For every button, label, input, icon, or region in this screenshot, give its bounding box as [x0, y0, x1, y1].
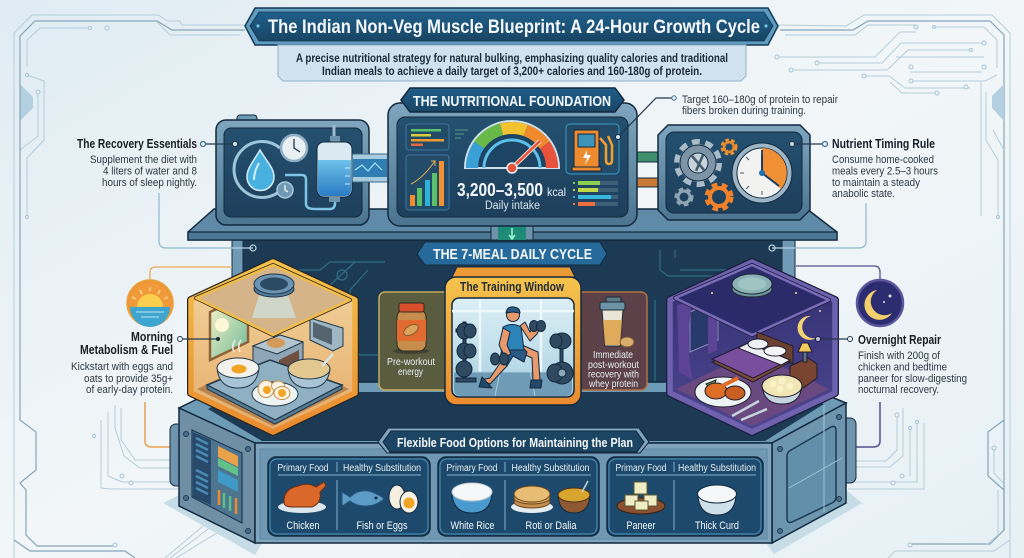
icon: paneer cubes [617, 482, 665, 514]
panel: recovery essentials machine [216, 115, 388, 225]
top lid [675, 265, 829, 335]
daily intake label: Daily intake [485, 200, 540, 212]
column headers: Healthy Substitution [343, 463, 421, 474]
oven [253, 335, 303, 377]
callout heading: Overnight Repair [858, 332, 941, 347]
circuit decoration: left [14, 15, 245, 558]
base console [170, 382, 856, 543]
icon: protein shaker [600, 297, 634, 347]
gym scene [452, 298, 574, 397]
nutrient timing callout [790, 136, 938, 200]
small bars card [406, 124, 468, 150]
cutlery [732, 401, 767, 420]
icon: fish [342, 491, 384, 506]
bed [712, 332, 793, 382]
gauge [465, 121, 559, 173]
panel: rice options [438, 457, 599, 536]
callout heading: Nutrient Timing Rule [832, 136, 935, 151]
plate: boiled eggs [252, 380, 298, 406]
recovery essentials callout [77, 136, 238, 189]
callout body: Kickstart with eggs and [71, 361, 173, 373]
subtitle panel [278, 45, 746, 81]
pipe link with glow [352, 154, 388, 182]
post-workout text: whey protein [588, 379, 638, 390]
icon: moon badge [857, 280, 903, 326]
title banner [245, 8, 778, 45]
callout body: nocturnal recovery. [858, 384, 939, 396]
icon: peanut butter jar [393, 303, 429, 354]
left control panel [192, 430, 242, 523]
icon: sunrise badge [127, 280, 173, 327]
heading text: THE NUTRITIONAL FOUNDATION [413, 93, 611, 110]
morning callout [71, 329, 220, 396]
connector lines [145, 193, 880, 447]
panel: post-workout [575, 292, 647, 390]
icon: eggs [389, 485, 418, 513]
tray [207, 360, 342, 424]
heading text: Flexible Food Options for Maintaining the Plan [397, 435, 633, 450]
heading: flexible food options [378, 428, 649, 453]
protein target callout [616, 94, 838, 140]
callout body: Consume home-cooked [832, 154, 934, 166]
plate: chicken [695, 377, 751, 407]
food labels: Thick Curd [695, 520, 739, 532]
overnight cube room [670, 262, 835, 432]
callout body: 4 liters of water and 8 [103, 166, 197, 178]
food labels: Chicken [286, 520, 320, 532]
icon: orange gear [708, 186, 730, 208]
callout text: fibers broken during training. [682, 105, 806, 117]
panel: pre-workout [379, 292, 451, 390]
rising bar chart [406, 155, 449, 210]
heading text: THE 7-MEAL DAILY CYCLE [433, 247, 592, 263]
circuit decoration: right [775, 15, 1010, 558]
calorie number: 3,200–3,500 [457, 180, 543, 200]
callout body: of early-day protein. [86, 384, 173, 396]
subtitle text: A precise nutritional strategy for natural bulking, emphasizing quality calories and traditional [296, 51, 728, 65]
food labels: Fish or Eggs [356, 520, 408, 532]
bowl: egg [217, 340, 259, 388]
icon: water tank [317, 125, 352, 202]
post-workout text: Immediate [593, 350, 633, 361]
icon: clock [281, 135, 307, 161]
top lid [196, 265, 350, 335]
training heading: The Training Window [460, 280, 564, 294]
moon [798, 316, 816, 340]
athlete [479, 307, 546, 388]
heading: nutritional foundation [401, 88, 624, 112]
overnight callout [816, 332, 967, 396]
callout text: Target 160–180g of protein to repair [682, 94, 838, 106]
microwave [310, 318, 343, 351]
title text: The Indian Non-Veg Muscle Blueprint: A 24-Hour Growth Cycle [268, 16, 760, 38]
bowl: paneer [762, 375, 802, 404]
icon: small orange gear [723, 141, 735, 153]
rack right [547, 333, 573, 384]
window [210, 295, 248, 360]
pre-workout text: energy [398, 367, 423, 378]
callout heading: Morning [131, 329, 173, 344]
green energy connector [491, 226, 533, 240]
callout body: meals every 2.5–3 hours [832, 166, 938, 178]
icon: roast chicken [278, 482, 326, 513]
night window and curtain [677, 300, 718, 380]
callout body: to maintain a steady [832, 177, 920, 189]
panel: nutritional foundation [388, 103, 637, 226]
column headers: Primary Food [278, 463, 328, 474]
callout heading: The Recovery Essentials [77, 136, 197, 151]
rack left [456, 322, 476, 382]
icon: small clock [277, 182, 293, 198]
shadows under base [163, 490, 862, 555]
food labels: Paneer [626, 520, 656, 532]
panel: training window [445, 267, 581, 405]
column headers: Primary Food [446, 463, 498, 474]
post-workout text: recovery with [588, 370, 639, 380]
callout body: Supplement the diet with [90, 154, 197, 166]
platform shelf [188, 209, 837, 240]
panel: nutrient timing machine [637, 125, 810, 220]
icon: dalia bowl [558, 481, 590, 513]
calorie unit: kcal [547, 185, 566, 199]
callout body: chicken and bedtime [858, 362, 947, 374]
right access panel [787, 405, 842, 522]
icon: timer clock [732, 143, 792, 203]
icon: roti stack [511, 486, 553, 513]
central dark circuit wall [232, 236, 795, 451]
column headers: Primary Food [616, 463, 666, 474]
icon: rice bowl [452, 483, 492, 513]
fuel pump icon [566, 124, 619, 174]
post-workout text: post-workout [588, 360, 639, 371]
heading: 7-meal daily cycle [417, 242, 607, 265]
callout body: hours of sleep nightly. [102, 177, 197, 189]
morning cube room [191, 262, 355, 432]
icon: grey gear [677, 190, 691, 204]
subtitle text: Indian meals to achieve a daily target of 3,200+ calories and 160-180g of protein. [322, 64, 702, 78]
callout body: paneer for slow-digesting [858, 373, 967, 385]
callout body: anabolic state. [832, 188, 895, 200]
nightstand and lamp [790, 343, 817, 388]
column headers: Healthy Substitution [512, 463, 590, 474]
food labels: White Rice [450, 520, 495, 532]
icon: large gear [679, 144, 717, 182]
callout body: Finish with 200g of [858, 350, 941, 362]
column headers: Healthy Substitution [678, 463, 756, 474]
screws [184, 414, 842, 534]
panel: chicken options [268, 457, 430, 536]
icon: water drop ring [234, 141, 335, 209]
panel: paneer options [607, 457, 763, 536]
food labels: Roti or Dalia [526, 520, 577, 532]
callout heading: Metabolism & Fuel [80, 342, 173, 357]
bowl: oats [288, 354, 333, 388]
icon: curd bowl [698, 485, 736, 515]
callout body: oats to provide 35g+ [84, 373, 173, 385]
progress bars [573, 181, 618, 206]
pre-workout text: Pre-workout [387, 357, 435, 368]
